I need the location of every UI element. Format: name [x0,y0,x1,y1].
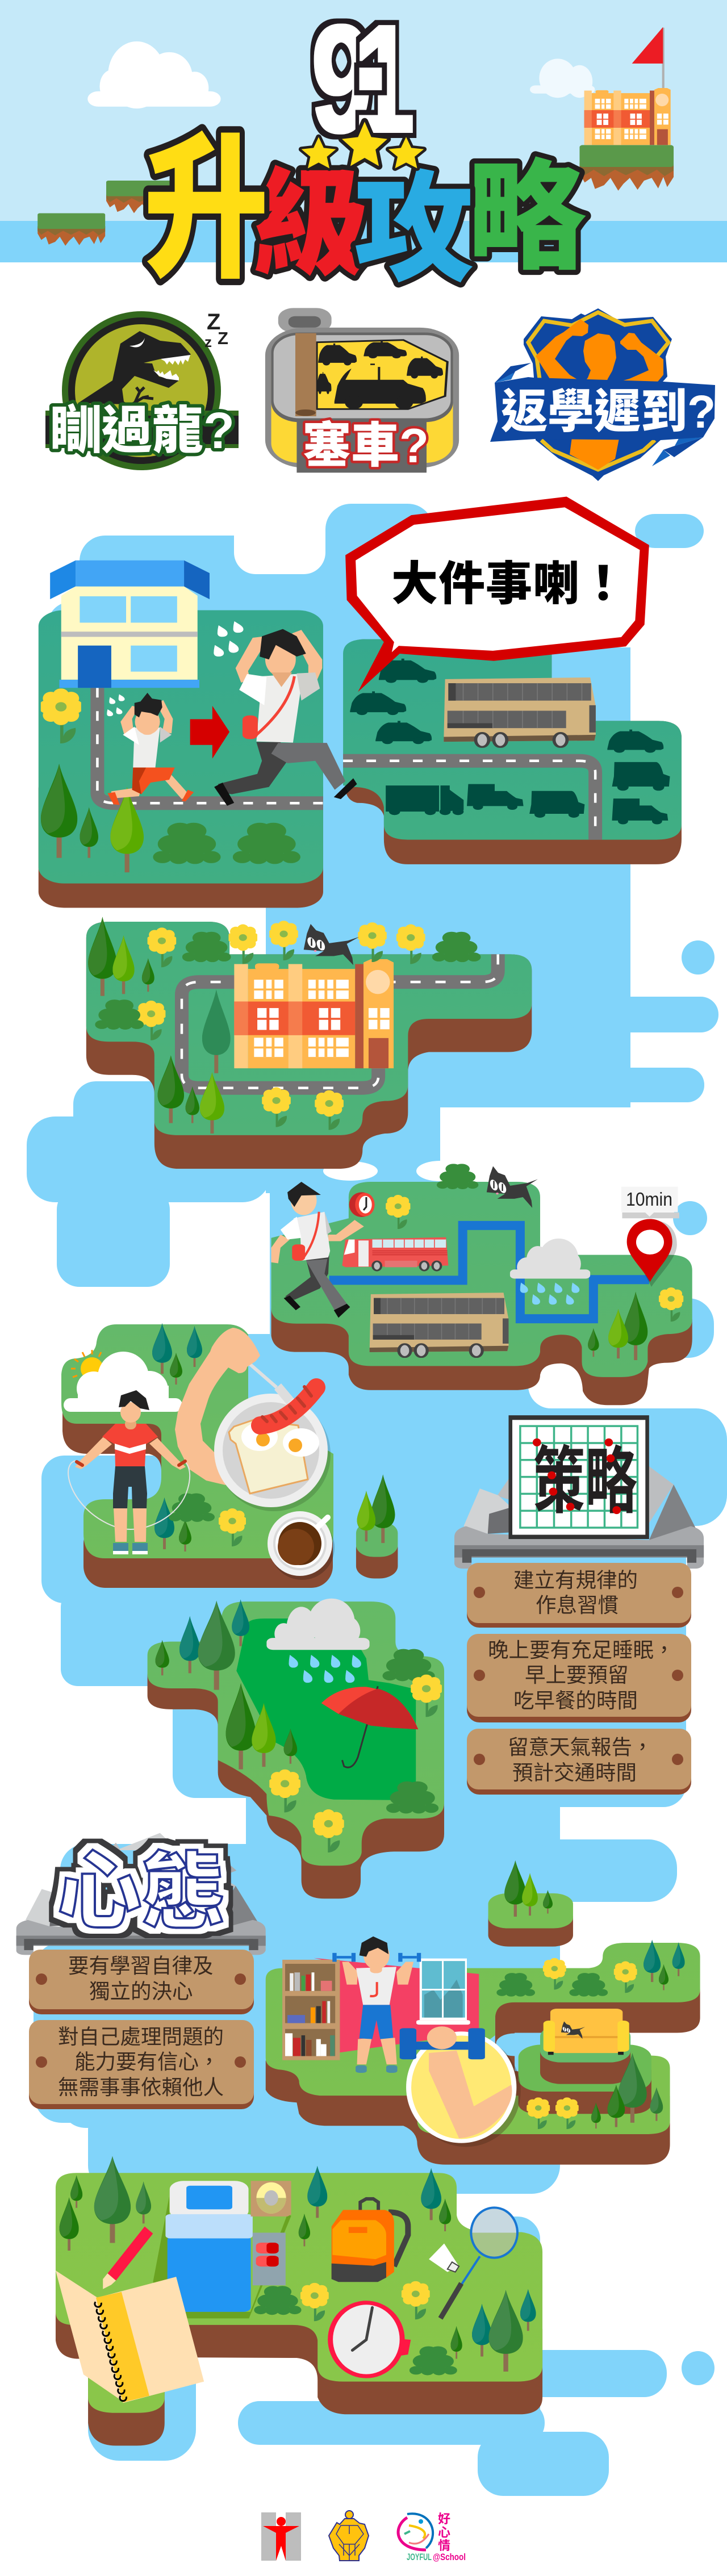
mindset plank: confidence: 能力要有信心， [74,2050,219,2073]
window [416,1959,470,2025]
strategy plank: weather report [467,1729,691,1795]
small tree island [356,1474,398,1578]
strategy plank: regular routine [467,1563,691,1628]
title stars [302,122,424,168]
bushes [153,823,300,864]
badge: overslept dinosaur: Z [207,310,220,334]
bushes and flowers [268,1649,444,1852]
blue route [329,1226,649,1319]
badge: overslept dinosaur [45,310,239,470]
mindset heading on rocks: 心態 [57,1846,225,1939]
inner tree [202,989,231,1073]
badge: late for school shield [490,308,716,481]
school building [234,959,394,1068]
shuttlecock [429,2244,459,2272]
logo: Joyful@School: 心 [438,2525,450,2540]
bush and flowers [385,1164,684,1322]
house [50,561,210,688]
badge: traffic jam sardine can [265,308,459,473]
trees [155,1599,297,1770]
mindset heading on rocks [16,1833,266,1955]
strategy plank: regular routine: 作息習慣 [536,1594,619,1617]
island: rain and umbrella [148,1599,444,1898]
strategy plank: enough sleep: 早上要預留 [525,1663,628,1687]
strategy plank: enough sleep: 晚上要有充足睡眠， [488,1638,675,1662]
logo: Joyful@School: 情 [438,2539,450,2553]
black cat [304,924,360,965]
bedside lamp [251,2181,291,2217]
trees [59,2156,536,2372]
small tree island [488,1860,573,1947]
pencil [103,2226,153,2289]
strategy plank: enough sleep [467,1634,691,1722]
badge: overslept dinosaur: 瞓過龍? [50,403,235,459]
badge: overslept dinosaur: z [204,333,212,350]
island: route planning [271,1164,692,1405]
sunflower [39,688,83,743]
bed [153,2181,291,2318]
sky and sea background [0,0,727,262]
big boy running [214,621,357,806]
time label [621,1187,679,1218]
trees [41,764,144,872]
bush and flower [169,1494,247,1546]
strategy heading on rocks: 策略 [533,1441,637,1523]
mindset plank: self discipline [29,1950,254,2014]
blue gap [496,2033,542,2056]
backpack [332,2199,408,2282]
road [343,761,595,840]
lawn patch [236,1619,416,1800]
speech bubble [345,496,649,692]
slippers on mat [253,2232,286,2285]
speech bubble: 大件事喇！ [391,558,627,610]
title: 升級攻略: 級 [252,160,369,290]
title: 升級攻略 [144,123,586,298]
double decker bus [444,678,596,747]
badge: traffic jam sardine can: 塞車? [303,419,429,473]
coffee cup [268,1511,335,1580]
strategy heading on rocks [454,1415,704,1569]
title: 9·1 [311,0,415,164]
floating islands in the sky [37,145,674,246]
student walking with clock [271,1182,375,1318]
chair terrace with armchair and cat [540,2009,630,2084]
strategy plank: weather report: 預計交通時間 [512,1761,637,1784]
mini school with flag [584,27,671,145]
zoomed arm with dumbbell [400,2026,521,2147]
pink wall [314,1958,479,2052]
island: school [86,917,532,1169]
red umbrella [321,1686,418,1767]
flowers [135,921,427,1130]
trees [152,1323,202,1552]
open notebook [56,2270,204,2403]
logo: Joyful@School: JOYFUL [407,2552,432,2562]
red bus [342,1237,448,1270]
island: home workout [266,1937,700,2165]
title: 升級攻略: 略 [467,150,586,284]
mindset plank: self discipline: 獨立的決心 [89,1980,193,2003]
logo: Joyful@School [398,2512,466,2562]
logo: hands and uniform [329,2511,369,2561]
badminton racket [440,2207,517,2318]
strategy plank: weather report: 留意天氣報告， [508,1736,653,1759]
trees [588,1291,647,1360]
double decker bus [370,1293,508,1357]
logo: red figure [261,2512,301,2561]
person lifting dumbbells [332,1937,421,2073]
clouds in the sky [87,41,595,108]
cloud and sun [64,1350,182,1412]
mindset plank: confidence: 對自己處理問題的 [58,2025,224,2048]
location pin [627,1219,677,1287]
rain cloud [266,1599,370,1683]
logo: Joyful@School: 好 [438,2512,450,2526]
mindset plank: confidence [29,2020,254,2109]
time label: 10min [626,1189,672,1210]
island: breakfast and exercise [61,1323,335,1588]
black cat [487,1166,538,1208]
rain cloud [510,1239,590,1304]
badge: late for school shield: 返學遲到? [501,386,716,438]
strategy plank: enough sleep: 吃早餐的時間 [513,1689,638,1712]
school road [182,954,498,1088]
jump rope person [68,1390,190,1554]
small boy panicking [107,693,194,805]
silhouettes of cars in traffic [350,659,670,825]
title: 升級攻略: 升 [144,123,269,298]
mindset plank: self discipline: 要有學習自律及 [68,1954,214,1977]
lower grass [417,2056,670,2134]
flowers and bushes [254,2281,457,2375]
logo: Joyful@School: @School [433,2552,466,2562]
strategy plank: regular routine: 建立有規律的 [513,1569,638,1592]
mindset plank: confidence: 無需事事依賴他人 [58,2076,224,2099]
trees [88,917,224,1134]
trees, bushes and flowers [496,1940,685,2129]
bushes [95,932,481,1030]
road from home [97,688,323,803]
island: home and running boy [39,561,357,908]
blue river background [27,500,727,2496]
island: traffic road [343,639,682,864]
alarm clock [328,2301,411,2378]
bookcase [282,1960,340,2060]
arm holding fork [175,1328,277,1485]
breakfast plate [214,1383,331,1511]
arrow [190,706,229,759]
island: packing for school [56,2156,542,2445]
badge: overslept dinosaur: Z [218,328,228,348]
middle terrace [519,2044,651,2114]
title: 9·1: · [352,1,397,153]
title: 升級攻略: 攻 [353,162,474,296]
